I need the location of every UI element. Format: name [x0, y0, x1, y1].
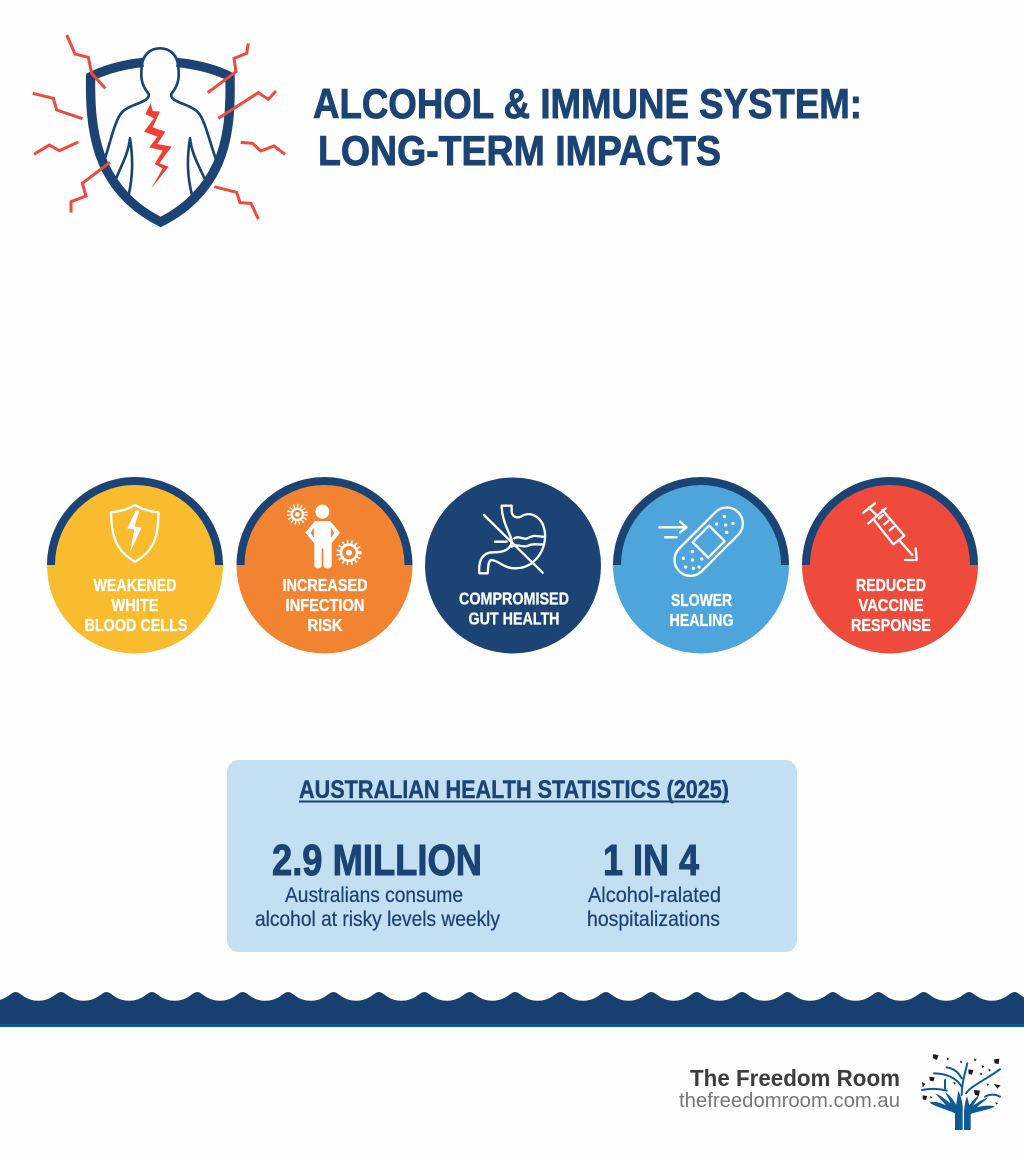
title — [313, 80, 862, 174]
label: REDUCED — [856, 575, 926, 595]
body outline — [105, 48, 216, 195]
panel: reduced vaccine response — [802, 477, 978, 654]
red zigzag lines — [33, 35, 285, 219]
lightning bolt — [144, 103, 172, 188]
label: COMPROMISED — [459, 588, 569, 608]
label — [282, 575, 368, 635]
stat: 2.9 million: Australians consume — [285, 884, 463, 907]
stat: 1 in 4: 1 IN 4 — [603, 836, 699, 885]
icon: shield with body and lightning — [33, 35, 285, 222]
label: HEALING — [670, 610, 734, 630]
label: BLOOD CELLS — [84, 615, 188, 635]
label: WEAKENED — [94, 575, 176, 595]
heading: AUSTRALIAN HEALTH STATISTICS (2025) — [299, 776, 729, 804]
shield outline — [91, 62, 230, 222]
icon: freedom room tree logo — [922, 1054, 1001, 1130]
icon: crossed stomach — [479, 506, 545, 573]
stat: 2.9 million: alcohol at risky levels weekly — [255, 908, 500, 931]
footer brand text: The Freedom Room — [690, 1065, 900, 1091]
panel: slower healing — [613, 477, 789, 654]
wave band — [0, 992, 1024, 1027]
icon: person and viruses — [289, 505, 360, 568]
label: WHITE — [112, 595, 158, 615]
stat: 2.9 million: 2.9 MILLION — [272, 836, 482, 885]
icon: syringe — [863, 503, 917, 560]
stat: 1 in 4: Alcohol-ralated — [588, 884, 721, 907]
title: LONG-TERM IMPACTS — [318, 127, 721, 174]
panel: increased infection risk — [236, 477, 412, 654]
title: ALCOHOL & IMMUNE SYSTEM: — [313, 80, 862, 127]
label: VACCINE — [858, 595, 924, 615]
icon: shield with bolt — [111, 505, 158, 562]
panel: weakened white blood cells — [47, 477, 223, 654]
label: RESPONSE — [851, 615, 931, 635]
icon: bandage and arrow — [659, 501, 749, 582]
label: INCREASED — [282, 575, 368, 595]
panel: compromised gut health — [425, 478, 601, 654]
panel: Australian health statistics — [227, 760, 797, 952]
stat: 1 in 4: hospitalizations — [587, 908, 720, 931]
label: RISK — [308, 615, 343, 635]
birds — [922, 1054, 1001, 1105]
label: INFECTION — [286, 595, 364, 615]
label: GUT HEALTH — [468, 608, 560, 628]
footer brand text: thefreedomroom.com.au — [679, 1089, 900, 1112]
label: SLOWER — [671, 590, 732, 610]
label — [670, 590, 734, 630]
label — [459, 588, 569, 628]
footer brand text — [679, 1065, 900, 1112]
hands and branches — [929, 1091, 995, 1130]
label — [84, 575, 188, 635]
stat: 2.9 million — [255, 836, 500, 931]
label — [851, 575, 931, 635]
stat: 1 in 4 — [587, 836, 721, 931]
